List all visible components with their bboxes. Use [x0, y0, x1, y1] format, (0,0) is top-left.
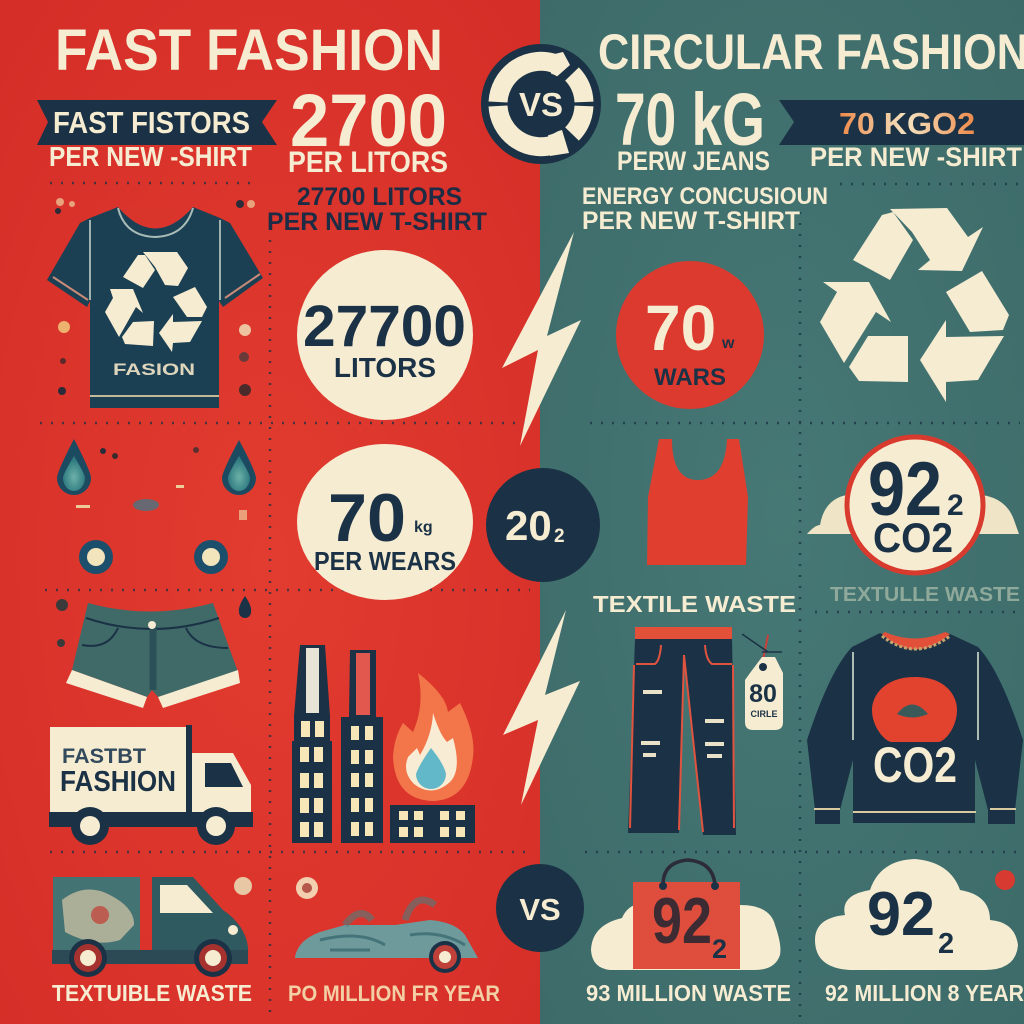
callout: 92 co2 cloud badge: 92 — [868, 447, 942, 532]
icon: red shopping bag on cloud: 2 — [712, 934, 727, 964]
callout: 27700 litors blob: 27700 — [303, 294, 466, 359]
callout: 70 wars red circle — [616, 261, 764, 409]
text: energy consumption caption: PER NEW T-SHIRT — [582, 207, 800, 235]
icon: flame with water drop — [393, 673, 473, 801]
text: perw jeans: PERW JEANS — [617, 146, 770, 176]
badge: 20 co2: 20 — [505, 502, 552, 549]
callout: 70 wars red circle: w — [721, 335, 735, 352]
stat: 70 kg: 70 kG — [615, 78, 765, 161]
panel: circular fashion header — [582, 24, 1024, 235]
text: dark litors caption — [267, 183, 487, 236]
callout: 27700 litors blob — [297, 250, 473, 420]
text: dark litors caption: 27700 LITORS — [297, 183, 462, 211]
icon: large recycling symbol — [820, 208, 1009, 402]
callout: 70 kg per wears blob: kg — [414, 519, 433, 536]
icon: red shopping bag on cloud — [591, 860, 780, 970]
badge: bottom vs — [496, 864, 584, 952]
callout: 27700 litors blob: LITORS — [334, 352, 436, 383]
badge: 20 co2 — [486, 468, 600, 582]
callout: 70 wars red circle: WARS — [654, 364, 726, 391]
callout: 70 wars red circle: 70 — [645, 292, 716, 364]
label: 93 million waste: 93 MILLION WASTE — [586, 980, 791, 1006]
panel: circular fashion background — [540, 0, 1024, 1024]
icon: truck carrying textile waste — [52, 877, 252, 977]
decoration: specks around t-shirt — [55, 198, 255, 396]
callout: 70 kg per wears blob: PER WEARS — [314, 546, 456, 576]
text: energy consumption caption: ENERGY CONCUSIOUN — [582, 183, 828, 210]
stat: 2700: 2700 — [290, 79, 447, 162]
callout: 70 kg per wears blob: 70 — [328, 480, 406, 556]
label: textile waste: TEXTILE WASTE — [593, 591, 796, 617]
icon: circular vs badge: VS — [519, 86, 563, 123]
icon: fast fashion delivery truck: FASHION — [60, 766, 176, 798]
icon: factories with chimneys — [292, 645, 475, 843]
ribbon: 70 kgo2 — [779, 100, 1024, 145]
text: energy consumption caption — [582, 183, 828, 235]
icon: t-shirt with recycling symbol — [47, 205, 263, 408]
icon: torn dark jeans with tag: 80 — [749, 680, 777, 708]
icon: fast fashion delivery truck — [49, 725, 253, 845]
icon: torn dark jeans with tag — [628, 627, 783, 835]
icon: lightning bolt bottom — [503, 610, 580, 805]
badge: bottom vs: VS — [519, 892, 561, 927]
icon: fast fashion delivery truck: FASTBT — [62, 745, 146, 768]
label: textuible waste: TEXTUIBLE WASTE — [52, 980, 252, 1006]
panel: fast fashion header — [37, 18, 487, 236]
title: fast fashion: FAST FASHION — [55, 18, 443, 83]
icon: torn dark jeans with tag: CIRLE — [750, 709, 778, 719]
callout: 92 co2 cloud badge: 2 — [947, 489, 964, 522]
callout: 92 co2 cloud badge: CO2 — [873, 514, 953, 561]
icon: red shopping bag on cloud: 92 — [652, 884, 712, 957]
badge: 20 co2: 2 — [554, 526, 565, 547]
ribbon: 70 kgo2: 70 KGO2 — [839, 106, 975, 141]
ribbon: fast fistors: FAST FISTORS — [53, 105, 250, 140]
text: dark litors caption: PER NEW T-SHIRT — [267, 208, 487, 236]
icon: t-shirt with recycling symbol: FASION — [113, 360, 195, 379]
icon: cloud with 92: 2 — [938, 928, 954, 960]
label: po million fr year: PO MILLION FR YEAR — [288, 981, 500, 1006]
icon: sweatshirt with co2 — [807, 632, 1023, 824]
icon: cloud with 92 — [815, 859, 1018, 970]
icon: denim shorts — [56, 596, 251, 708]
icon: lightning bolt top — [502, 232, 581, 446]
panel: fast fashion background — [0, 0, 540, 1024]
text: per litors: PER LITORS — [288, 146, 448, 179]
callout: 70 kg per wears blob — [297, 444, 473, 600]
icon: red tank top — [647, 439, 748, 565]
icon: water drops and rings — [57, 439, 256, 574]
callout: 92 co2 cloud badge — [807, 437, 1019, 573]
text: per new shirt: PER NEW -SHIRT — [49, 141, 252, 172]
label: faded textulle waste: TEXTULLE WASTE — [830, 584, 1020, 606]
icon: cloud with 92: 92 — [867, 880, 935, 949]
icon: sweatshirt with co2: CO2 — [873, 737, 957, 793]
icon: circular vs badge — [481, 44, 601, 164]
icon: textile waste car pile — [295, 877, 478, 973]
